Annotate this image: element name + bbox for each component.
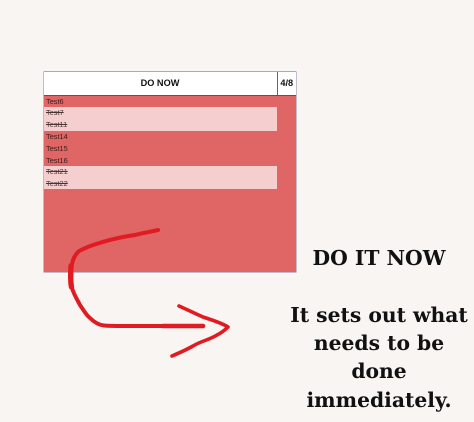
body line 3: done	[351, 359, 407, 383]
panel: do now list	[44, 72, 296, 272]
task: Test7: Test7	[46, 108, 64, 117]
heading: do it now: DO IT NOW	[313, 246, 445, 270]
counter: 4 of 8	[276, 72, 296, 95]
body line 1: It sets out what	[290, 302, 468, 326]
task: Test16: Test16	[46, 156, 68, 165]
counter: 4 of 8: 4/8	[280, 78, 293, 88]
task: Test22: Test22	[46, 179, 68, 188]
task: Test14: Test14	[46, 132, 68, 141]
task: Test15: Test15	[46, 144, 68, 153]
task: Test21: Test21	[46, 167, 68, 176]
task: Test11: Test11	[46, 120, 67, 129]
task: Test6: Test6	[46, 97, 64, 106]
header bar	[44, 72, 296, 96]
body line 4: immediately.	[306, 388, 452, 412]
heading: do now: DO NOW	[141, 78, 179, 88]
text block: do it now explanation	[290, 246, 468, 412]
highlight band: completed tasks 7 and 11	[44, 107, 277, 131]
body line 2: needs to be	[314, 330, 444, 354]
highlight band: completed tasks 21 and 22	[44, 166, 277, 189]
